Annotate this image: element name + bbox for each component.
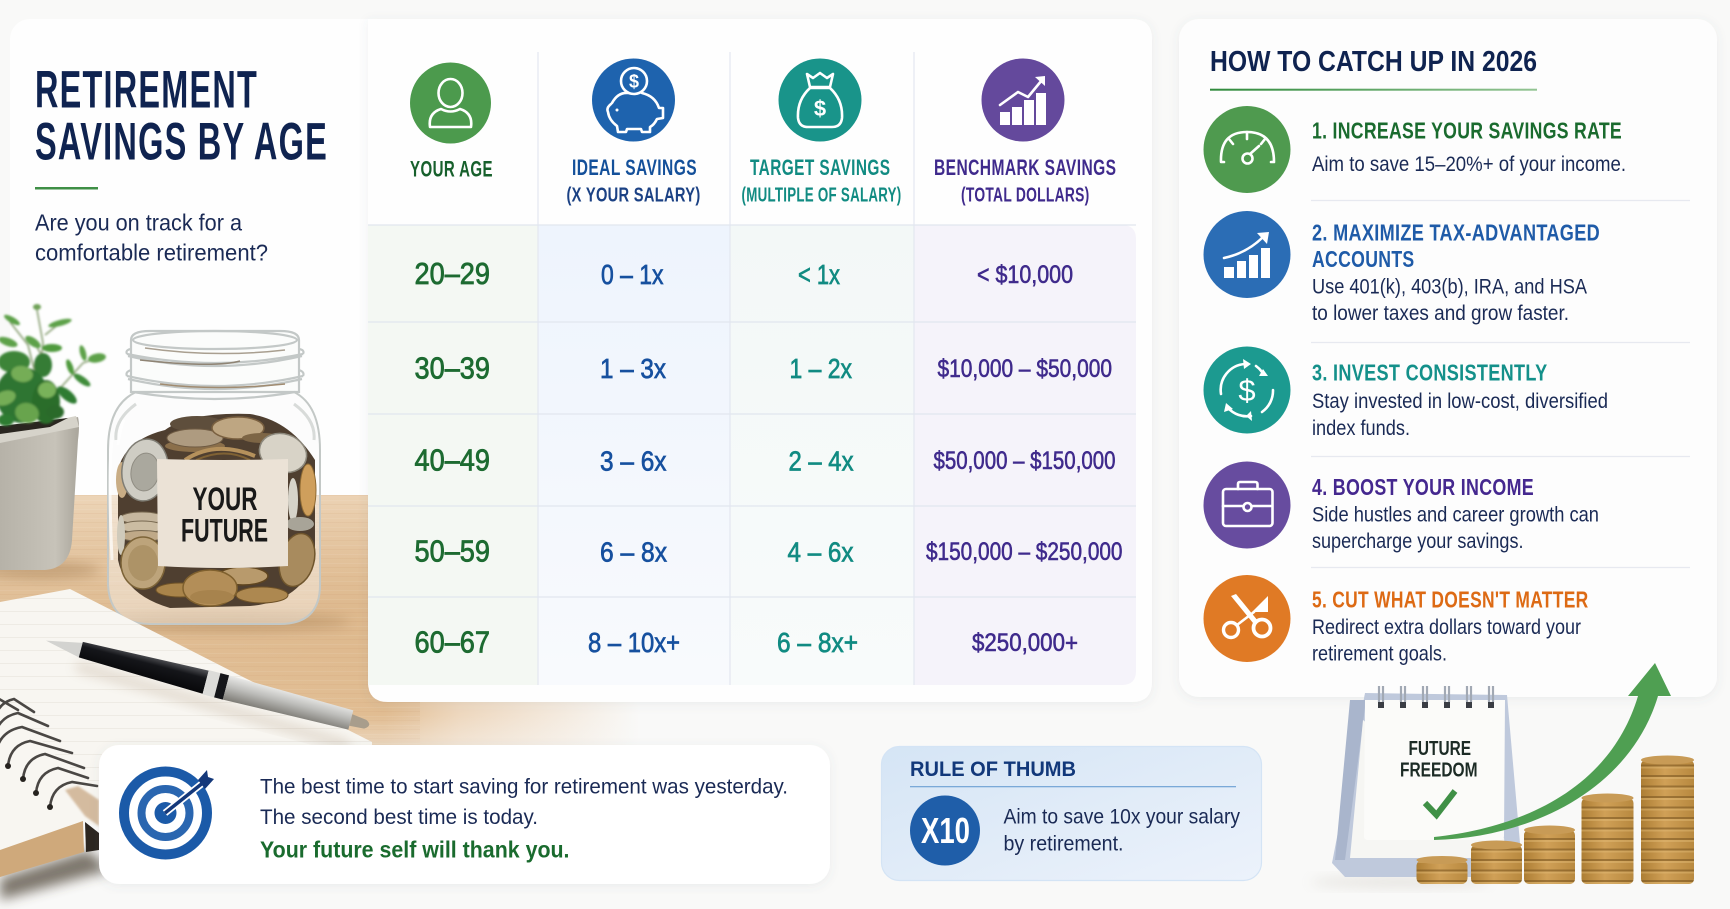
tip 2: 2. MAXIMIZE TAX-ADVANTAGED: [1312, 220, 1600, 246]
illustration: calendar with coin stacks and growth arrow: [1310, 663, 1694, 888]
tip 2: Use 401(k), 403(b), IRA, and HSA: [1312, 276, 1587, 298]
column header: your age: [410, 62, 493, 182]
callout: rule of thumb: Aim to save 10x your salary: [1004, 806, 1240, 828]
title: retirement savings by age: RETIREMENT: [35, 60, 258, 120]
calendar rings: [1378, 686, 1494, 708]
calendar: future freedom: FREEDOM: [1400, 760, 1478, 782]
jar label: your future: YOUR: [192, 481, 258, 517]
panel: how to catch up in 2026: [1179, 19, 1717, 697]
title: retirement savings by age: SAVINGS BY AGE: [35, 112, 328, 172]
column header: target savings: [742, 58, 902, 206]
subtitle: comfortable retirement?: [35, 240, 268, 266]
tip 4: 4. BOOST YOUR INCOME: [1312, 474, 1534, 500]
column header: your age: YOUR AGE: [410, 156, 493, 182]
tip dividers: [1311, 200, 1690, 568]
row: 50-59: [414, 534, 1122, 568]
tip 2: ACCOUNTS: [1312, 246, 1414, 272]
row: 50-59: 6 – 8x: [600, 536, 667, 568]
callout: best time to start: The second best time is today.: [260, 805, 538, 829]
callout: best time to start: Your future self will thank you.: [260, 836, 570, 862]
jar label: your future: [157, 459, 288, 568]
column header: ideal savings: [566, 58, 700, 206]
glass jar with coins: [100, 331, 350, 631]
notebook spiral binding: [0, 696, 97, 807]
column tints: [368, 225, 1136, 685]
wooden desk surface: [0, 495, 800, 909]
column header: target savings: (MULTIPLE OF SALARY): [742, 184, 902, 206]
tip 1: 1. INCREASE YOUR SAVINGS RATE: [1312, 118, 1622, 144]
tip 3: Stay invested in low-cost, diversified: [1312, 390, 1608, 413]
row: 20-29: < $10,000: [977, 261, 1073, 289]
row: 60-67: $250,000+: [972, 629, 1078, 657]
callout: rule of thumb: [882, 746, 1262, 880]
icon: growth chart: [982, 58, 1064, 142]
row: 60-67: 8 – 10x+: [588, 627, 680, 658]
icon: money bag: [778, 58, 862, 142]
table card background: [368, 19, 1152, 702]
row: 20-29: < 1x: [798, 259, 840, 290]
panel: savings table: [368, 19, 1152, 702]
plant pot: [0, 416, 100, 579]
ring end dots: [5, 763, 53, 810]
callout: best time to start: The best time to start saving for retirement was yesterday.: [260, 774, 788, 798]
calendar: future freedom: [1332, 686, 1520, 877]
tip 4: [1204, 462, 1599, 553]
rule of thumb divider: [910, 786, 1236, 787]
card background: [1179, 19, 1717, 697]
tip 1: Aim to save 15–20%+ of your income.: [1312, 153, 1626, 176]
title underline: [35, 187, 98, 190]
row: 30-39: [414, 350, 1112, 386]
row: 30-39: 1 – 3x: [600, 353, 666, 384]
column header: benchmark savings: [934, 58, 1116, 206]
row: 20-29: [414, 256, 1073, 291]
tip 5: 5. CUT WHAT DOESN'T MATTER: [1312, 586, 1588, 612]
tip 1: [1204, 106, 1626, 193]
row: 40-49: 40–49: [414, 442, 490, 478]
callout: rule of thumb: by retirement.: [1004, 832, 1124, 856]
jar neck and rim: [126, 331, 304, 399]
row: 50-59: 4 – 6x: [788, 536, 854, 568]
row: 20-29: 20–29: [414, 256, 490, 291]
subtitle: Are you on track for a: [35, 210, 242, 236]
row: 50-59: 50–59: [414, 534, 490, 568]
callout: best time to start: [99, 745, 830, 884]
column header: benchmark savings: BENCHMARK SAVINGS: [934, 155, 1116, 180]
column header: ideal savings: (X YOUR SALARY): [566, 184, 700, 206]
tip 5: retirement goals.: [1312, 642, 1447, 666]
icon: scissors: [1204, 575, 1290, 662]
tip 4: supercharge your savings.: [1312, 530, 1524, 553]
panel heading: HOW TO CATCH UP IN 2026: [1210, 46, 1537, 78]
icon: rising chart: [1204, 211, 1290, 298]
photo: desk scene with jar, plant, notebook and pen: [0, 304, 800, 909]
column header: benchmark savings: (TOTAL DOLLARS): [961, 184, 1090, 206]
row: 40-49: [414, 442, 1116, 478]
tip 3: index funds.: [1312, 417, 1410, 440]
notebook: [0, 589, 372, 900]
tip 2: [1204, 211, 1600, 325]
tip 5: Redirect extra dollars toward your: [1312, 616, 1581, 639]
badge: x10: X10: [921, 810, 970, 851]
row: 40-49: 3 – 6x: [600, 446, 666, 476]
jar label: your future: FUTURE: [181, 512, 268, 548]
row: 30-39: 1 – 2x: [790, 353, 852, 384]
icon: gauge: [1204, 106, 1290, 193]
icon: piggy bank: [592, 58, 675, 142]
tip 5: [1204, 575, 1588, 666]
row: 60-67: [414, 624, 1078, 660]
row: 30-39: $10,000 – $50,000: [938, 355, 1112, 383]
column header: target savings: TARGET SAVINGS: [750, 155, 890, 180]
icon: person: [410, 62, 491, 144]
icon: piggy bank: $: [629, 72, 639, 92]
plant leaves: [0, 304, 107, 426]
tip 3: [1204, 346, 1608, 440]
grid lines: [368, 52, 1136, 685]
badge: x10: [910, 796, 980, 866]
title: retirement savings by age: [35, 60, 328, 172]
arrow: growth: [1434, 663, 1671, 840]
column header: ideal savings: IDEAL SAVINGS: [572, 155, 697, 180]
heading underline: [1210, 89, 1537, 91]
icon: money bag: $: [814, 96, 826, 121]
calendar: future freedom: FUTURE: [1408, 738, 1471, 760]
icon: briefcase: [1204, 462, 1290, 548]
row: 50-59: $150,000 – $250,000: [926, 538, 1122, 566]
tip 3: 3. INVEST CONSISTENTLY: [1312, 360, 1548, 386]
pen: [39, 629, 372, 752]
icon: check mark: [1425, 791, 1455, 815]
icon: investment cycle: [1204, 346, 1290, 434]
row: 40-49: $50,000 – $150,000: [934, 447, 1116, 475]
icon: investment cycle: $: [1238, 373, 1256, 408]
row: 20-29: 0 – 1x: [601, 259, 664, 290]
tip 4: Side hustles and career growth can: [1312, 504, 1599, 526]
row: 40-49: 2 – 4x: [788, 446, 854, 476]
callout: rule of thumb: RULE OF THUMB: [910, 758, 1076, 781]
subtitle: [35, 210, 268, 266]
coin stacks: [1416, 756, 1694, 884]
icon: target with arrow: [124, 770, 214, 854]
row: 30-39: 30–39: [414, 350, 490, 386]
coins: [116, 414, 320, 608]
tip 2: to lower taxes and grow faster.: [1312, 302, 1569, 325]
panel: main white card: [10, 19, 1152, 702]
row: 60-67: 6 – 8x+: [777, 627, 858, 658]
row: 60-67: 60–67: [414, 624, 490, 660]
